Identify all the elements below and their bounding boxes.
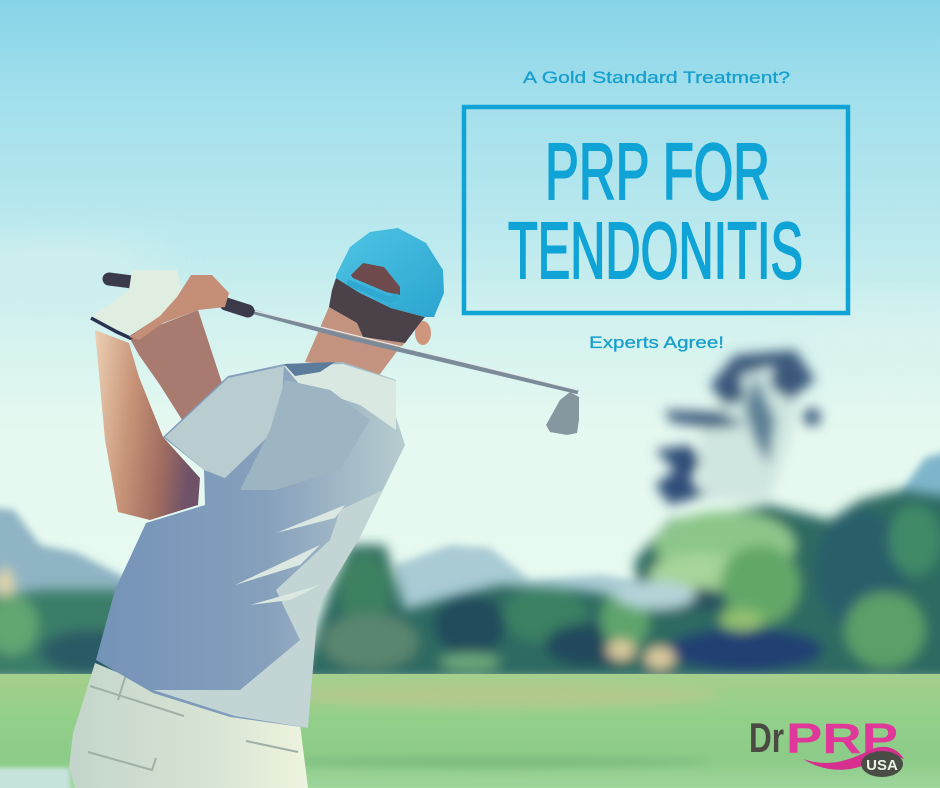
golf club shaft — [250, 311, 578, 392]
glove — [91, 270, 182, 337]
club head — [546, 392, 579, 435]
forearm raised — [95, 330, 200, 520]
club grip — [109, 279, 248, 311]
hair — [329, 278, 425, 343]
hand — [129, 275, 229, 340]
tagline bottom: Experts Agree! — [589, 333, 724, 352]
trouser details — [88, 668, 298, 770]
hair seen through cap opening — [351, 263, 400, 295]
logo: Dr PRP USA: USA — [866, 757, 898, 774]
title — [508, 127, 803, 295]
trousers — [69, 663, 308, 788]
golfer — [69, 228, 579, 788]
title box — [464, 107, 848, 313]
shirt — [96, 362, 405, 728]
logo: Dr PRP USA: Dr — [749, 714, 784, 761]
distant hills — [0, 445, 940, 630]
grass — [0, 674, 940, 788]
cap strap — [347, 282, 398, 300]
cap — [336, 228, 444, 317]
ear — [415, 321, 431, 345]
upper arm — [129, 310, 222, 423]
logo: Dr PRP USA — [749, 714, 904, 777]
tagline top: A Gold Standard Treatment? — [523, 68, 790, 87]
blurred tree line — [0, 490, 940, 680]
shirt light folds — [153, 362, 396, 728]
neck — [305, 307, 405, 378]
title: PRP FOR — [545, 127, 770, 216]
cloud haze — [0, 242, 940, 356]
logo: Dr PRP USA: PRP — [786, 715, 898, 763]
tree top with sparse foliage — [655, 350, 821, 505]
